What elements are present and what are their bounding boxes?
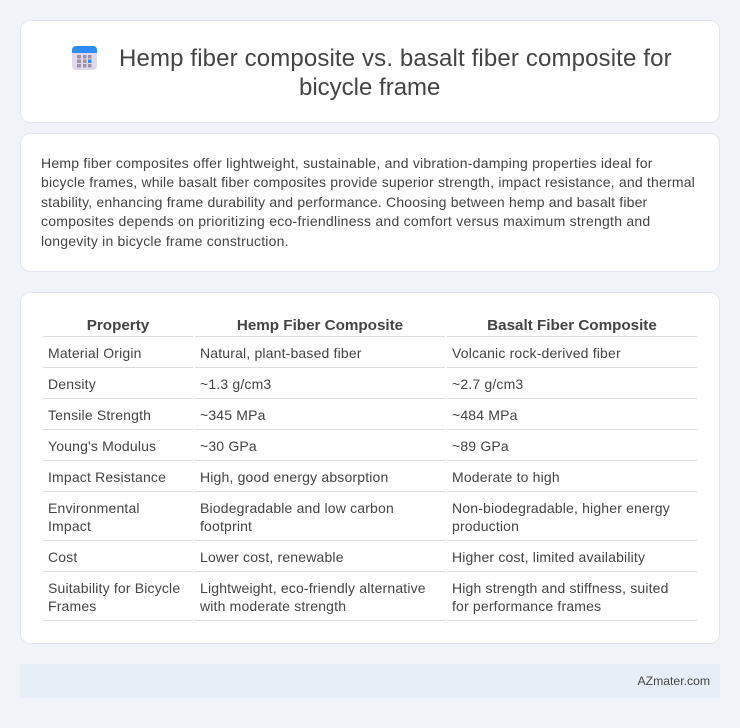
summary text: bicycle frames, while basalt fiber composites provide superior strength, impact resistance, and thermal	[41, 174, 695, 190]
row: suitability for bicycle frames: Suitability for Bicycle	[48, 580, 180, 596]
row: environmental impact: footprint	[200, 518, 252, 534]
row: material origin: Volcanic rock-derived fiber	[452, 345, 621, 361]
icon: calendar grid	[72, 46, 97, 70]
row: material origin: Material Origin	[48, 345, 142, 361]
summary text: stability, enhancing frame durability and performance. Choosing between hemp and basalt fiber	[41, 194, 647, 210]
row: tensile strength	[43, 407, 697, 430]
row: suitability for bicycle frames: High strength and stiffness, suited	[452, 580, 669, 596]
footer brand text: AZmater.com	[638, 674, 710, 688]
summary text	[41, 155, 695, 249]
row: impact resistance	[43, 469, 697, 492]
table header: Basalt Fiber Composite	[487, 317, 657, 334]
row: impact resistance: High, good energy absorption	[200, 469, 388, 485]
row: young's modulus: Young's Modulus	[48, 438, 156, 454]
row: suitability for bicycle frames: Frames	[48, 598, 96, 614]
row: tensile strength: ~484 MPa	[452, 407, 518, 423]
title: Hemp fiber composite vs. basalt fiber composite for	[119, 45, 672, 72]
footer bar	[20, 664, 720, 698]
summary text: Hemp fiber composites offer lightweight, sustainable, and vibration-damping properties ideal for	[41, 155, 653, 171]
row: material origin	[43, 345, 697, 368]
row: impact resistance: Impact Resistance	[48, 469, 166, 485]
row: environmental impact: Biodegradable and low carbon	[200, 500, 394, 516]
row: density: ~2.7 g/cm3	[452, 376, 523, 392]
row: tensile strength: ~345 MPa	[200, 407, 266, 423]
panel: comparison table card	[20, 292, 720, 644]
row: material origin: Natural, plant-based fiber	[200, 345, 362, 361]
row: young's modulus	[43, 438, 697, 461]
row: cost	[43, 549, 697, 572]
title	[119, 45, 672, 101]
row: suitability for bicycle frames: with moderate strength	[200, 598, 346, 614]
row: density	[43, 376, 697, 399]
summary text: composites depends on prioritizing eco-friendliness and comfort versus maximum strength and	[41, 213, 650, 229]
row: suitability for bicycle frames	[43, 580, 697, 621]
row: environmental impact: production	[452, 518, 519, 534]
row: young's modulus: ~30 GPa	[200, 438, 257, 454]
summary text: longevity in bicycle frame construction.	[41, 233, 289, 249]
row: cost: Cost	[48, 549, 77, 565]
row: cost: Lower cost, renewable	[200, 549, 344, 565]
row: suitability for bicycle frames: Lightweight, eco-friendly alternative	[200, 580, 426, 596]
row: cost: Higher cost, limited availability	[452, 549, 645, 565]
row: environmental impact: Non-biodegradable, higher energy	[452, 500, 670, 516]
row: young's modulus: ~89 GPa	[452, 438, 509, 454]
table header: Property	[87, 317, 149, 334]
row: environmental impact: Impact	[48, 518, 91, 534]
row: impact resistance: Moderate to high	[452, 469, 560, 485]
row: tensile strength: Tensile Strength	[48, 407, 151, 423]
panel: summary card	[20, 133, 720, 272]
table header: Hemp Fiber Composite	[237, 317, 403, 334]
row: density: Density	[48, 376, 96, 392]
row: suitability for bicycle frames: for performance frames	[452, 598, 601, 614]
title: bicycle frame	[299, 74, 440, 101]
panel: title card	[20, 20, 720, 123]
table header	[43, 317, 697, 337]
row: environmental impact	[43, 500, 697, 541]
row: density: ~1.3 g/cm3	[200, 376, 271, 392]
row: environmental impact: Environmental	[48, 500, 140, 516]
